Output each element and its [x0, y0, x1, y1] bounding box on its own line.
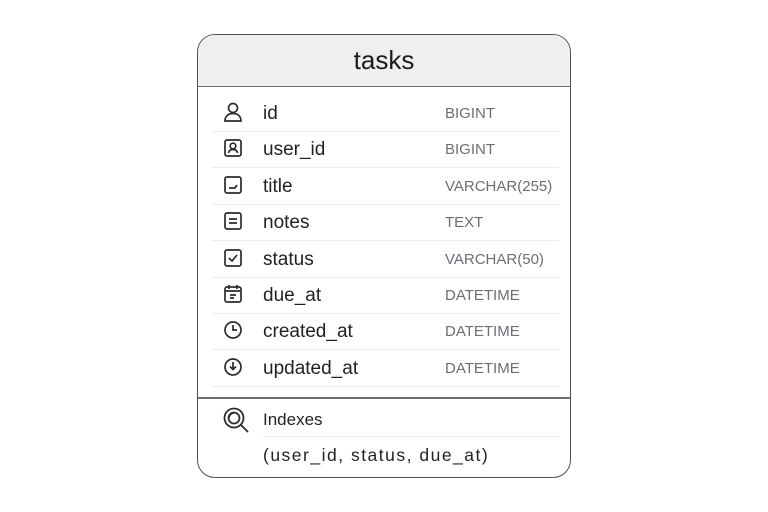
title header: [198, 35, 570, 87]
row: created_at: created_at: [263, 321, 353, 342]
panel: tasks table card: [197, 34, 571, 478]
row: notes: [224, 212, 483, 233]
row: status: [224, 249, 544, 270]
title header: tasks: [354, 45, 414, 75]
row: updated_at: DATETIME: [445, 360, 520, 377]
row: created_at: [224, 321, 520, 342]
row: created_at: DATETIME: [445, 323, 520, 340]
row: due_at: DATETIME: [445, 287, 520, 304]
row: id: id: [263, 103, 278, 124]
row: updated_at: updated_at: [263, 358, 358, 379]
row: due_at: [224, 285, 520, 306]
row: title: title: [263, 176, 293, 197]
row: updated_at: [224, 358, 520, 379]
row: notes: TEXT: [445, 214, 483, 231]
row: id: BIGINT: [445, 105, 495, 122]
row: status: status: [263, 249, 314, 270]
row: user_id: BIGINT: [445, 141, 495, 158]
indexes section: [224, 408, 559, 465]
row: id: [224, 102, 495, 124]
row: due_at: due_at: [263, 285, 321, 306]
index definition: (user_id, status, due_at): [263, 445, 489, 465]
row: user_id: [224, 139, 495, 160]
row: user_id: user_id: [263, 139, 325, 160]
row: title: VARCHAR(255): [445, 178, 552, 195]
row: notes: notes: [263, 212, 309, 233]
icon: magnifier: [224, 408, 249, 433]
row: status: VARCHAR(50): [445, 251, 544, 268]
row: title: [224, 176, 552, 197]
indexes label: Indexes: [263, 410, 323, 429]
